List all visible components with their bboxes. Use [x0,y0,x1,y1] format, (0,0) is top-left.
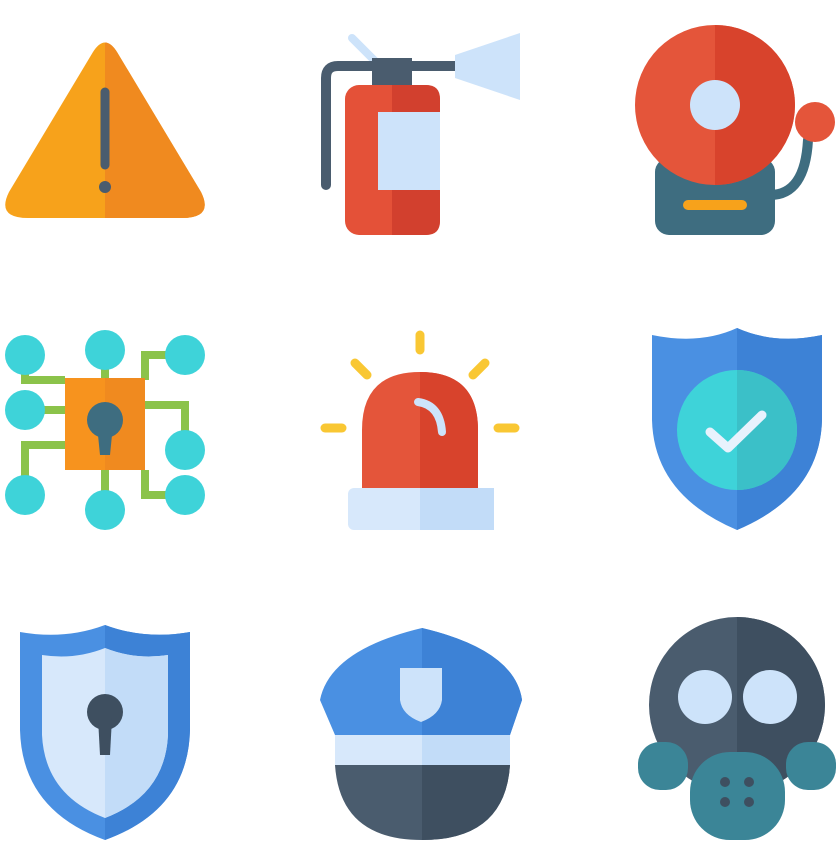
icon: siren [325,335,515,530]
icon: warning triangle [5,42,205,218]
icon: gas mask [638,617,836,840]
icon: shield check [652,328,822,530]
icon: shield lock [20,625,190,840]
icon: police hat [320,628,522,840]
icon: fire extinguisher [326,33,520,235]
icon: alarm bell [635,25,835,235]
icon: security chip [5,330,205,530]
